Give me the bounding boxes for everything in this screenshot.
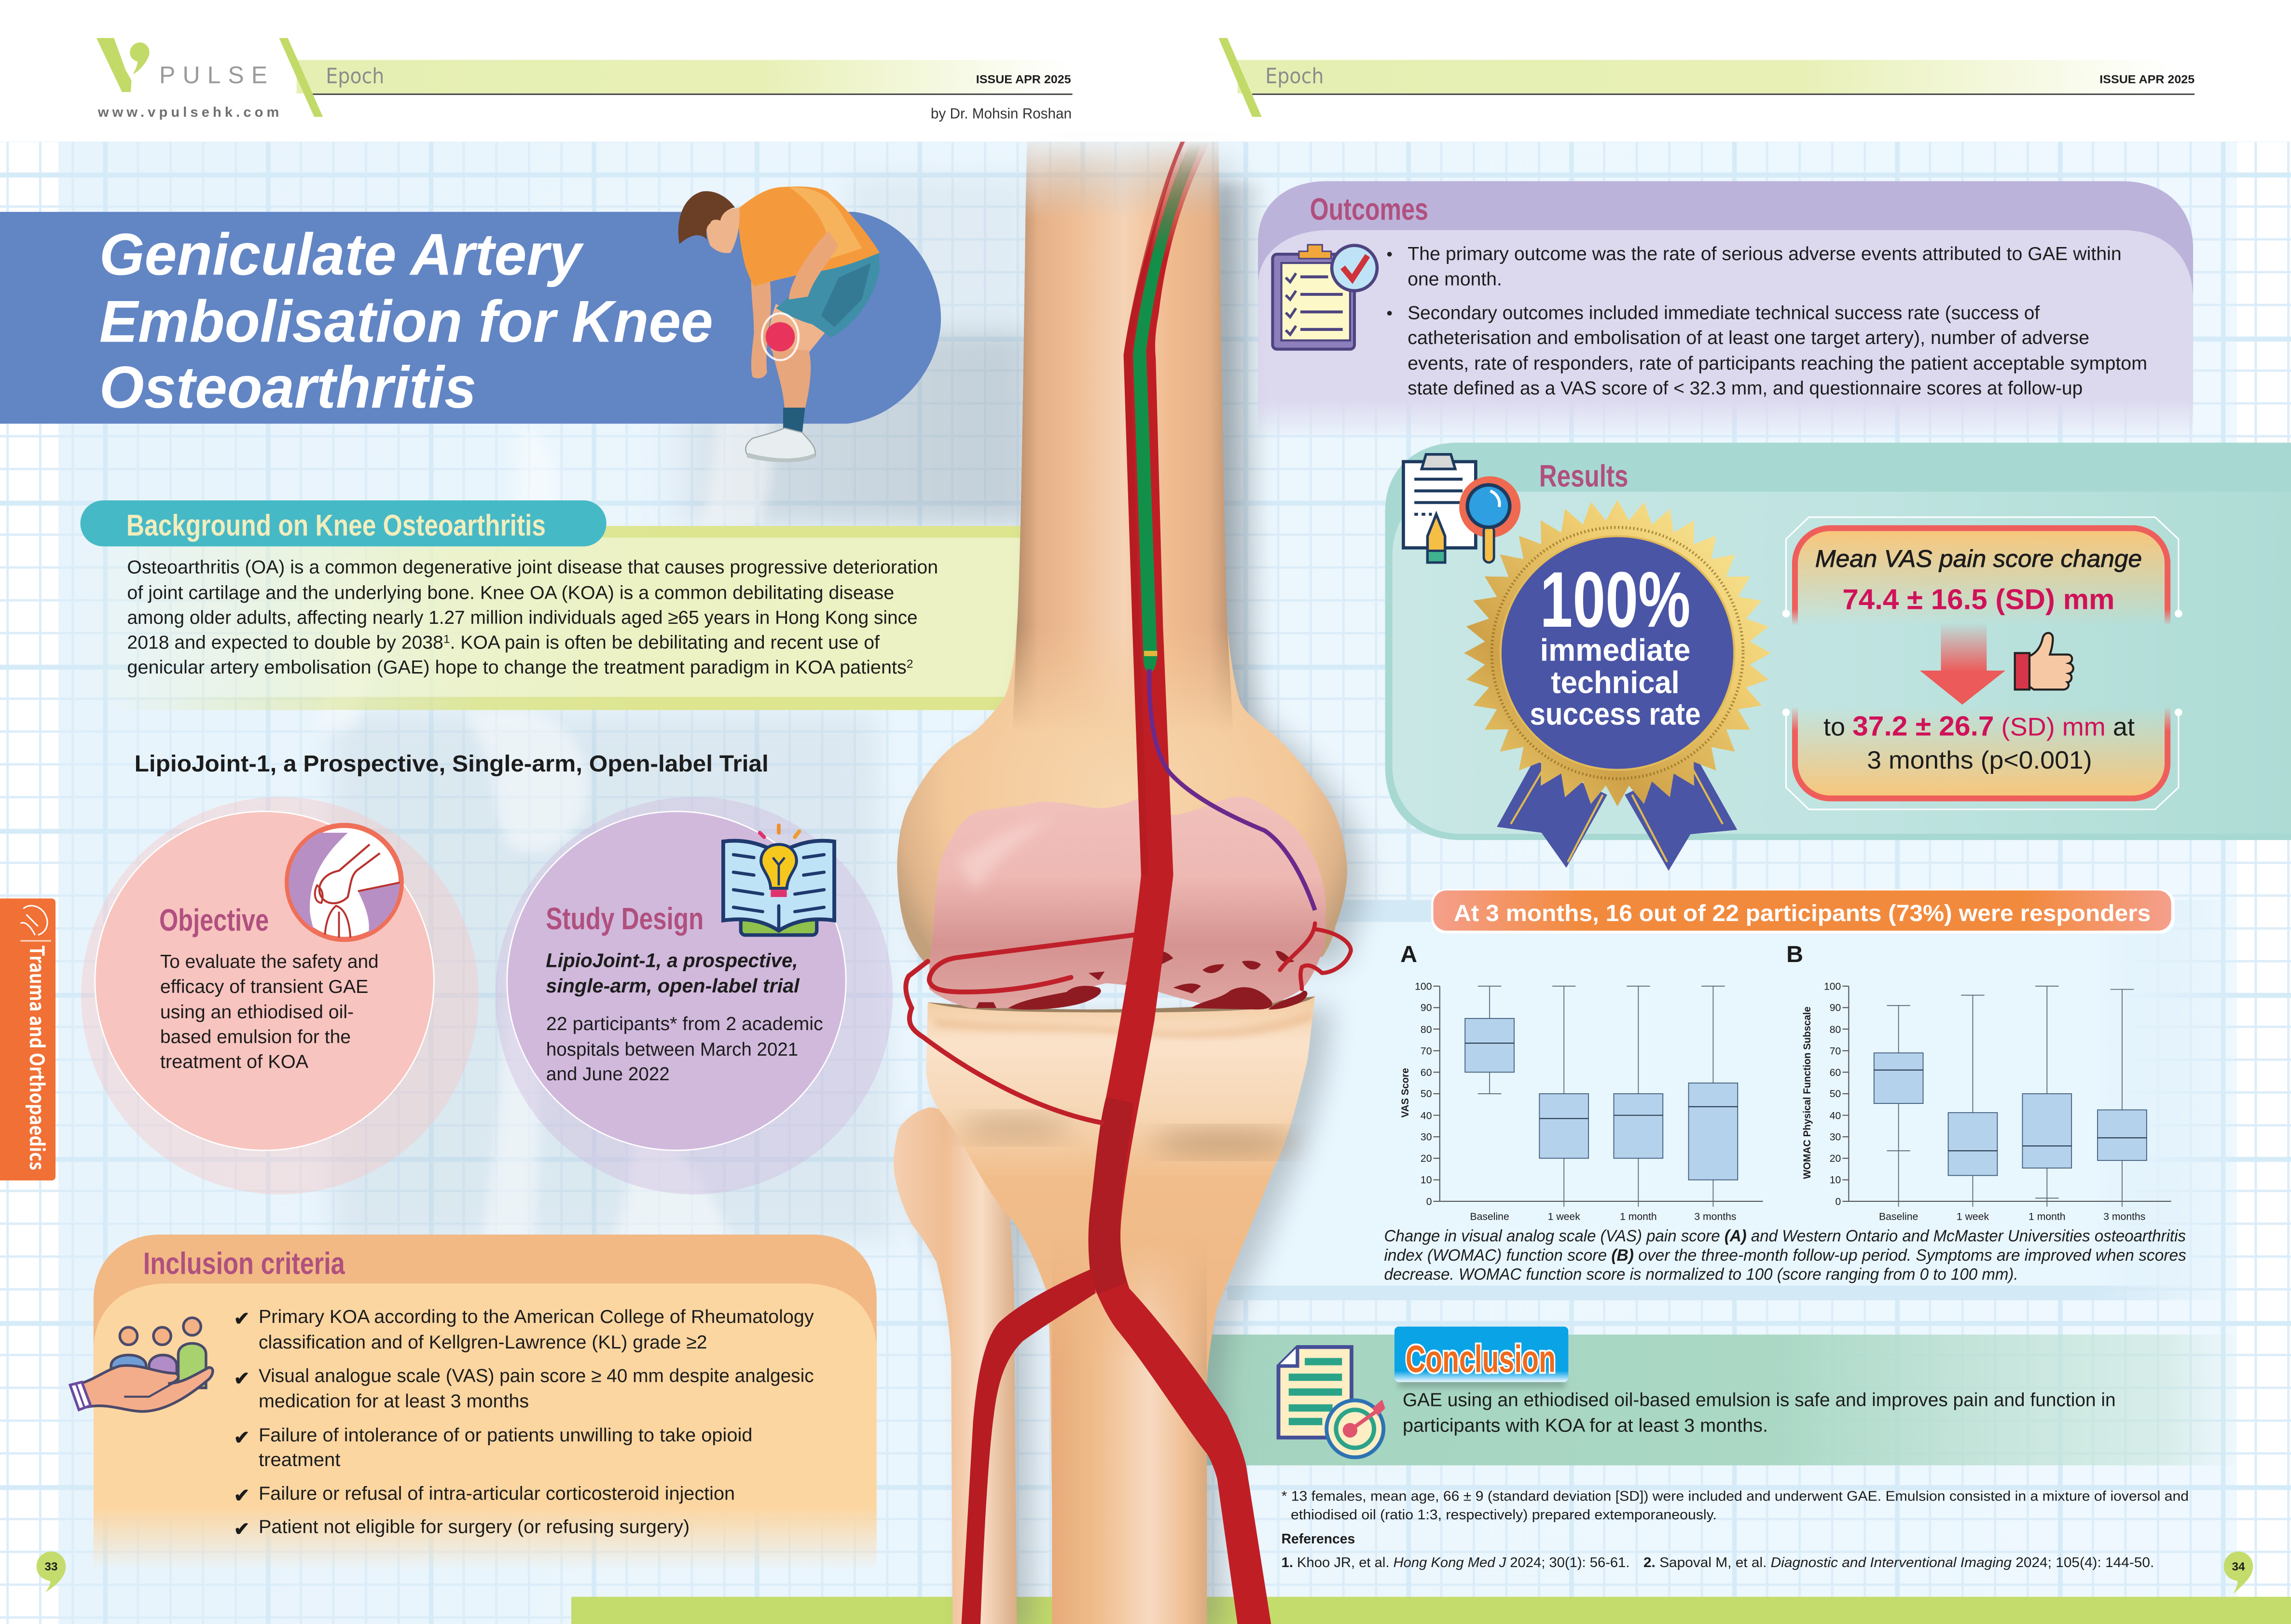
badge text	[1530, 555, 1701, 731]
x labels: Baseline	[1879, 1211, 1918, 1222]
panel: outcomes	[1258, 181, 2193, 440]
y labels: 50	[1421, 1088, 1432, 1100]
footnotes and references: ethiodised oil (ratio 1:3, respectively) prepared extemporaneously.	[1291, 1507, 1717, 1523]
y labels: 100	[1415, 981, 1432, 992]
panel header shape	[94, 1235, 877, 1388]
footnotes and references	[1282, 1489, 2189, 1570]
body text: hospitals between March 2021	[546, 1039, 798, 1060]
conclusion tag shadow	[1398, 1375, 1565, 1388]
criteria checkmarks: ✔	[234, 1427, 249, 1448]
header left	[97, 38, 1073, 122]
panel top band	[175, 526, 1052, 538]
section label: Epoch	[326, 64, 384, 89]
success badge	[1464, 500, 1771, 806]
footnotes and references: 2. Sapoval M, et al. Diagnostic and Interventional Imaging 2024; 105(4): 144-50.	[1643, 1555, 2154, 1570]
catheter	[1133, 142, 1202, 672]
paragraph: Osteoarthritis (OA) is a common degenerative joint disease that causes progressive deterioration	[127, 557, 938, 578]
heading: Study Design	[546, 902, 704, 936]
articular cartilage	[929, 796, 1326, 1008]
icon: document and target	[1279, 1347, 1385, 1457]
panel: study design	[496, 797, 893, 1194]
panel body	[73, 537, 1052, 697]
VAS callout	[1782, 517, 2182, 810]
body text: and June 2022	[546, 1063, 670, 1085]
panel inner shape	[1393, 492, 2291, 834]
bullets: state defined as a VAS score of < 32.3 mm, and questionnaire scores at follow-up	[1408, 378, 2083, 399]
paragraph: 2	[907, 658, 913, 671]
criteria list	[259, 1306, 814, 1538]
y labels: 100	[1824, 981, 1841, 992]
page number 34: 34	[2232, 1560, 2245, 1573]
panel body shape	[94, 1283, 877, 1570]
logo wordmark: PULSE	[159, 62, 267, 89]
icon: open book with bulb	[723, 826, 834, 935]
heading: Objective	[159, 903, 269, 937]
header slash	[1218, 38, 1262, 117]
section label: Epoch	[1265, 64, 1324, 89]
inner circle	[507, 812, 846, 1150]
bullets	[1387, 243, 2147, 399]
cartilage highlights	[957, 818, 1052, 891]
y labels: 40	[1421, 1110, 1432, 1121]
badge text: technical	[1551, 665, 1680, 700]
x labels: 1 month	[2029, 1211, 2066, 1222]
axes	[1434, 986, 1763, 1201]
criteria checkmarks: ✔	[234, 1308, 249, 1329]
tibia	[926, 996, 1315, 1624]
left artery branch	[961, 1269, 1096, 1624]
paragraph	[127, 557, 938, 678]
banner text: At 3 months, 16 out of 22 participants (73%) were responders	[1454, 900, 2151, 926]
page number 34	[2224, 1552, 2253, 1594]
x labels: 1 week	[1957, 1211, 1989, 1222]
y labels	[1824, 981, 1841, 1208]
panel: objective	[81, 797, 479, 1194]
y axis title: WOMAC Physical Function Subscale	[1802, 1006, 1813, 1179]
y labels: 70	[1421, 1046, 1432, 1057]
x labels: 1 week	[1548, 1211, 1580, 1222]
criteria list: Failure of intolerance of or patients unwilling to take opioid	[259, 1424, 752, 1445]
knee redness	[766, 322, 795, 351]
callout box	[1795, 528, 2167, 798]
criteria list: Visual analogue scale (VAS) pain score ≥ 40 mm despite analgesic	[259, 1365, 814, 1387]
title: Osteoarthritis	[99, 354, 476, 420]
y labels	[1415, 981, 1432, 1208]
follow-up value: to 37.2 ± 26.7 (SD) mm at	[1823, 711, 2135, 742]
paragraph: genicular artery embolisation (GAE) hope to change the treatment paradigm in KOA patients	[127, 657, 890, 678]
bullets: catheterisation and embolisation of at least one target artery), number of adverse	[1408, 327, 2089, 348]
bullets: The primary outcome was the rate of serious adverse events attributed to GAE within	[1408, 243, 2122, 264]
badge ribbons	[1497, 760, 1737, 871]
paragraph: . KOA pain is often be debilitating and recent use of	[450, 632, 880, 653]
panel: conclusion band	[1207, 1335, 2237, 1465]
paragraph: among older adults, affecting nearly 1.27 million individuals aged ≥65 years in Hong Kong since	[127, 607, 918, 628]
responders banner	[1431, 889, 2175, 934]
baseline value: 74.4 ± 16.5 (SD) mm	[1842, 584, 2115, 616]
title: Geniculate Artery	[99, 221, 584, 287]
y labels: 10	[1421, 1175, 1432, 1186]
background heading panel	[73, 500, 1052, 710]
tab shape	[0, 898, 55, 1181]
illustration: knee joint	[894, 142, 1365, 1624]
y labels: 90	[1830, 1002, 1841, 1013]
y labels: 60	[1830, 1067, 1841, 1078]
callout heading: Mean VAS pain score change	[1815, 545, 2142, 572]
whiskers	[1478, 986, 1725, 1207]
body text: efficacy of transient GAE	[160, 976, 368, 997]
header right	[1218, 38, 2194, 117]
chart caption	[1384, 1227, 2186, 1284]
header slash	[279, 38, 323, 117]
x labels: 3 months	[2103, 1211, 2145, 1222]
panel bottom band	[102, 697, 1052, 710]
medians	[1874, 1070, 2147, 1151]
outer halo	[496, 797, 893, 1194]
heading: Results	[1539, 459, 1628, 493]
criteria list: Primary KOA according to the American College of Rheumatology	[259, 1306, 814, 1327]
conclusion text: GAE using an ethiodised oil-based emulsion is safe and improves pain and function in	[1403, 1390, 2116, 1411]
author: by Dr. Mohsin Roshan	[931, 105, 1072, 122]
heading: Inclusion criteria	[143, 1246, 345, 1280]
y labels: 10	[1830, 1175, 1841, 1186]
body text: To evaluate the safety and	[160, 951, 379, 972]
study title	[546, 950, 800, 997]
y labels: 0	[1426, 1197, 1432, 1208]
panel: charts background	[1228, 900, 2236, 1300]
criteria list: Failure or refusal of intra-articular corticosteroid injection	[259, 1483, 735, 1504]
study title: LipioJoint-1, a prospective,	[546, 950, 798, 972]
whiskers	[1887, 986, 2134, 1207]
y axis title: VAS Score	[1400, 1068, 1411, 1117]
panel: results	[1385, 443, 2291, 871]
face	[706, 207, 740, 253]
icon: thumbs up	[2015, 633, 2073, 689]
heading: Outcomes	[1310, 193, 1428, 227]
x labels	[1879, 1211, 2145, 1222]
criteria checkmarks: ✔	[234, 1518, 249, 1540]
y labels: 80	[1830, 1024, 1841, 1035]
medians	[1465, 1043, 1738, 1118]
bullets: one month.	[1408, 269, 1502, 290]
follow-up note: 3 months (p<0.001)	[1867, 746, 2092, 774]
criteria list: treatment	[259, 1449, 341, 1471]
study title: single-arm, open-label trial	[546, 975, 800, 997]
inner circle	[95, 812, 434, 1150]
body text	[160, 951, 379, 1073]
conclusion text	[1403, 1390, 2116, 1436]
logo url: www.vpulsehk.com	[97, 105, 279, 120]
criteria checkmarks	[234, 1308, 249, 1540]
footnotes and references: * 13 females, mean age, 66 ± 9 (standard deviation [SD]) were included and underwent GAE. Emulsion consisted in a mixture of ioversol and	[1282, 1489, 2189, 1504]
criteria list: Patient not eligible for surgery (or refusing surgery)	[259, 1516, 690, 1538]
panel body shape	[1258, 230, 2193, 440]
genicular arteries	[906, 923, 1351, 1123]
lower leg	[772, 348, 811, 409]
heading pill	[81, 500, 607, 546]
body text: 22 participants* from 2 academic	[546, 1013, 823, 1034]
y labels: 0	[1836, 1197, 1841, 1208]
x labels: 3 months	[1694, 1211, 1737, 1222]
arrow down	[1920, 622, 2005, 704]
boxes	[1465, 1018, 1738, 1180]
arm on thigh	[789, 231, 839, 300]
y labels: 80	[1421, 1024, 1432, 1035]
knee ring	[762, 314, 799, 360]
criteria list: classification and of Kellgren-Lawrence (KL) grade ≥2	[259, 1332, 707, 1353]
chart caption: decrease. WOMAC function score is normalized to 100 (score ranging from 0 to 100 mm).	[1384, 1266, 2018, 1284]
badge seal	[1464, 500, 1771, 806]
title	[99, 221, 713, 420]
femur	[897, 142, 1347, 964]
panel letter: B	[1786, 941, 1803, 967]
y labels: 20	[1421, 1153, 1432, 1164]
chart caption: index (WOMAC) function score (B) over the three-month follow-up period. Symptoms are improved when scores	[1384, 1246, 2186, 1265]
panel letter: A	[1400, 941, 1417, 967]
bullets: Secondary outcomes included immediate technical success rate (success of	[1408, 302, 2040, 323]
footnotes and references: 1. Khoo JR, et al. Hong Kong Med J 2024; 30(1): 56-61.	[1282, 1555, 1629, 1570]
criteria checkmarks: ✔	[234, 1368, 249, 1390]
conclusion text: participants with KOA for at least 3 months.	[1403, 1415, 1768, 1436]
thigh	[769, 304, 827, 354]
x labels: 1 month	[1620, 1211, 1657, 1222]
header band	[1238, 60, 2173, 94]
chart B	[1786, 941, 2171, 1222]
x labels: Baseline	[1470, 1211, 1509, 1222]
torso shirt	[738, 186, 880, 287]
shoe	[745, 428, 815, 461]
page number 33	[37, 1552, 66, 1593]
paragraph: of joint cartilage and the underlying bone. Knee OA (KOA) is a common debilitating disease	[127, 583, 894, 604]
paragraph: 2018 and expected to double by 2038	[127, 632, 440, 653]
fibula	[894, 1107, 1017, 1624]
paragraph: 1	[443, 633, 450, 646]
title: Embolisation for Knee	[99, 289, 713, 355]
conclusion heading: Conclusion	[1406, 1337, 1556, 1380]
y labels: 60	[1421, 1067, 1432, 1078]
y labels: 70	[1830, 1046, 1841, 1057]
bottom green bar	[571, 1597, 2291, 1624]
axes	[1842, 986, 2171, 1201]
body text: treatment of KOA	[160, 1051, 309, 1073]
y labels: 30	[1830, 1132, 1841, 1143]
icon: report and magnifier	[1403, 454, 1520, 563]
logo mark	[97, 38, 150, 92]
y labels: 20	[1830, 1153, 1841, 1164]
tab label: Trauma and Orthopaedics	[24, 945, 53, 1170]
header band	[297, 60, 1071, 94]
body text: based emulsion for the	[160, 1026, 351, 1047]
boxes	[1874, 1053, 2147, 1175]
panel header shape	[1258, 181, 2193, 351]
panel outer shape	[1385, 443, 2291, 840]
icon: checklist clipboard	[1272, 245, 1377, 349]
hair	[678, 191, 735, 244]
badge text: immediate	[1540, 632, 1690, 667]
sock	[783, 408, 805, 434]
panel: inclusion criteria	[70, 1235, 877, 1570]
body text	[546, 1013, 823, 1085]
title banner	[0, 212, 941, 424]
soft shadow of bones	[911, 151, 1365, 1624]
badge text: success rate	[1530, 696, 1701, 731]
conclusion content	[1279, 1326, 2116, 1457]
shorts	[776, 251, 880, 337]
criteria list: medication for at least 3 months	[259, 1390, 529, 1412]
chart A	[1400, 941, 1763, 1222]
icon: knee anatomy	[287, 826, 401, 950]
issue label: ISSUE APR 2025	[976, 73, 1071, 86]
tab icon	[20, 906, 51, 941]
body text: using an ethiodised oil-	[160, 1002, 354, 1023]
side tab	[0, 898, 55, 1181]
callout frame	[1786, 517, 2179, 810]
issue label: ISSUE APR 2025	[2099, 73, 2194, 86]
icon: hand holding people	[70, 1318, 213, 1411]
y labels: 90	[1421, 1002, 1432, 1013]
page number 33: 33	[45, 1560, 57, 1573]
criteria checkmarks: ✔	[234, 1485, 249, 1506]
outer halo	[81, 797, 479, 1194]
cartilage erosions	[976, 950, 1307, 1010]
badge text: 100%	[1540, 555, 1690, 644]
illustration: man holding knee	[678, 186, 880, 462]
chart caption: Change in visual analog scale (VAS) pain score (A) and Western Ontario and McMaster Universities osteoarthritis	[1384, 1227, 2186, 1245]
y labels: 50	[1830, 1088, 1841, 1100]
x-ray ghost of legs	[314, 175, 1271, 1242]
header rule	[1252, 94, 2194, 95]
header rule	[313, 94, 1073, 95]
conclusion tag	[1394, 1326, 1568, 1382]
hanging arm	[751, 277, 771, 378]
main artery	[1089, 142, 1271, 1624]
bullets: events, rate of responders, rate of participants reaching the patient acceptable symptom	[1408, 353, 2147, 374]
trial heading: LipioJoint-1, a Prospective, Single-arm, Open-label Trial	[135, 751, 769, 777]
y labels: 30	[1421, 1132, 1432, 1143]
x labels	[1470, 1211, 1737, 1222]
footnotes and references: References	[1282, 1531, 1355, 1547]
y labels: 40	[1830, 1110, 1841, 1121]
micro-catheter wire	[1149, 669, 1315, 910]
heading: Background on Knee Osteoarthritis	[126, 509, 546, 542]
